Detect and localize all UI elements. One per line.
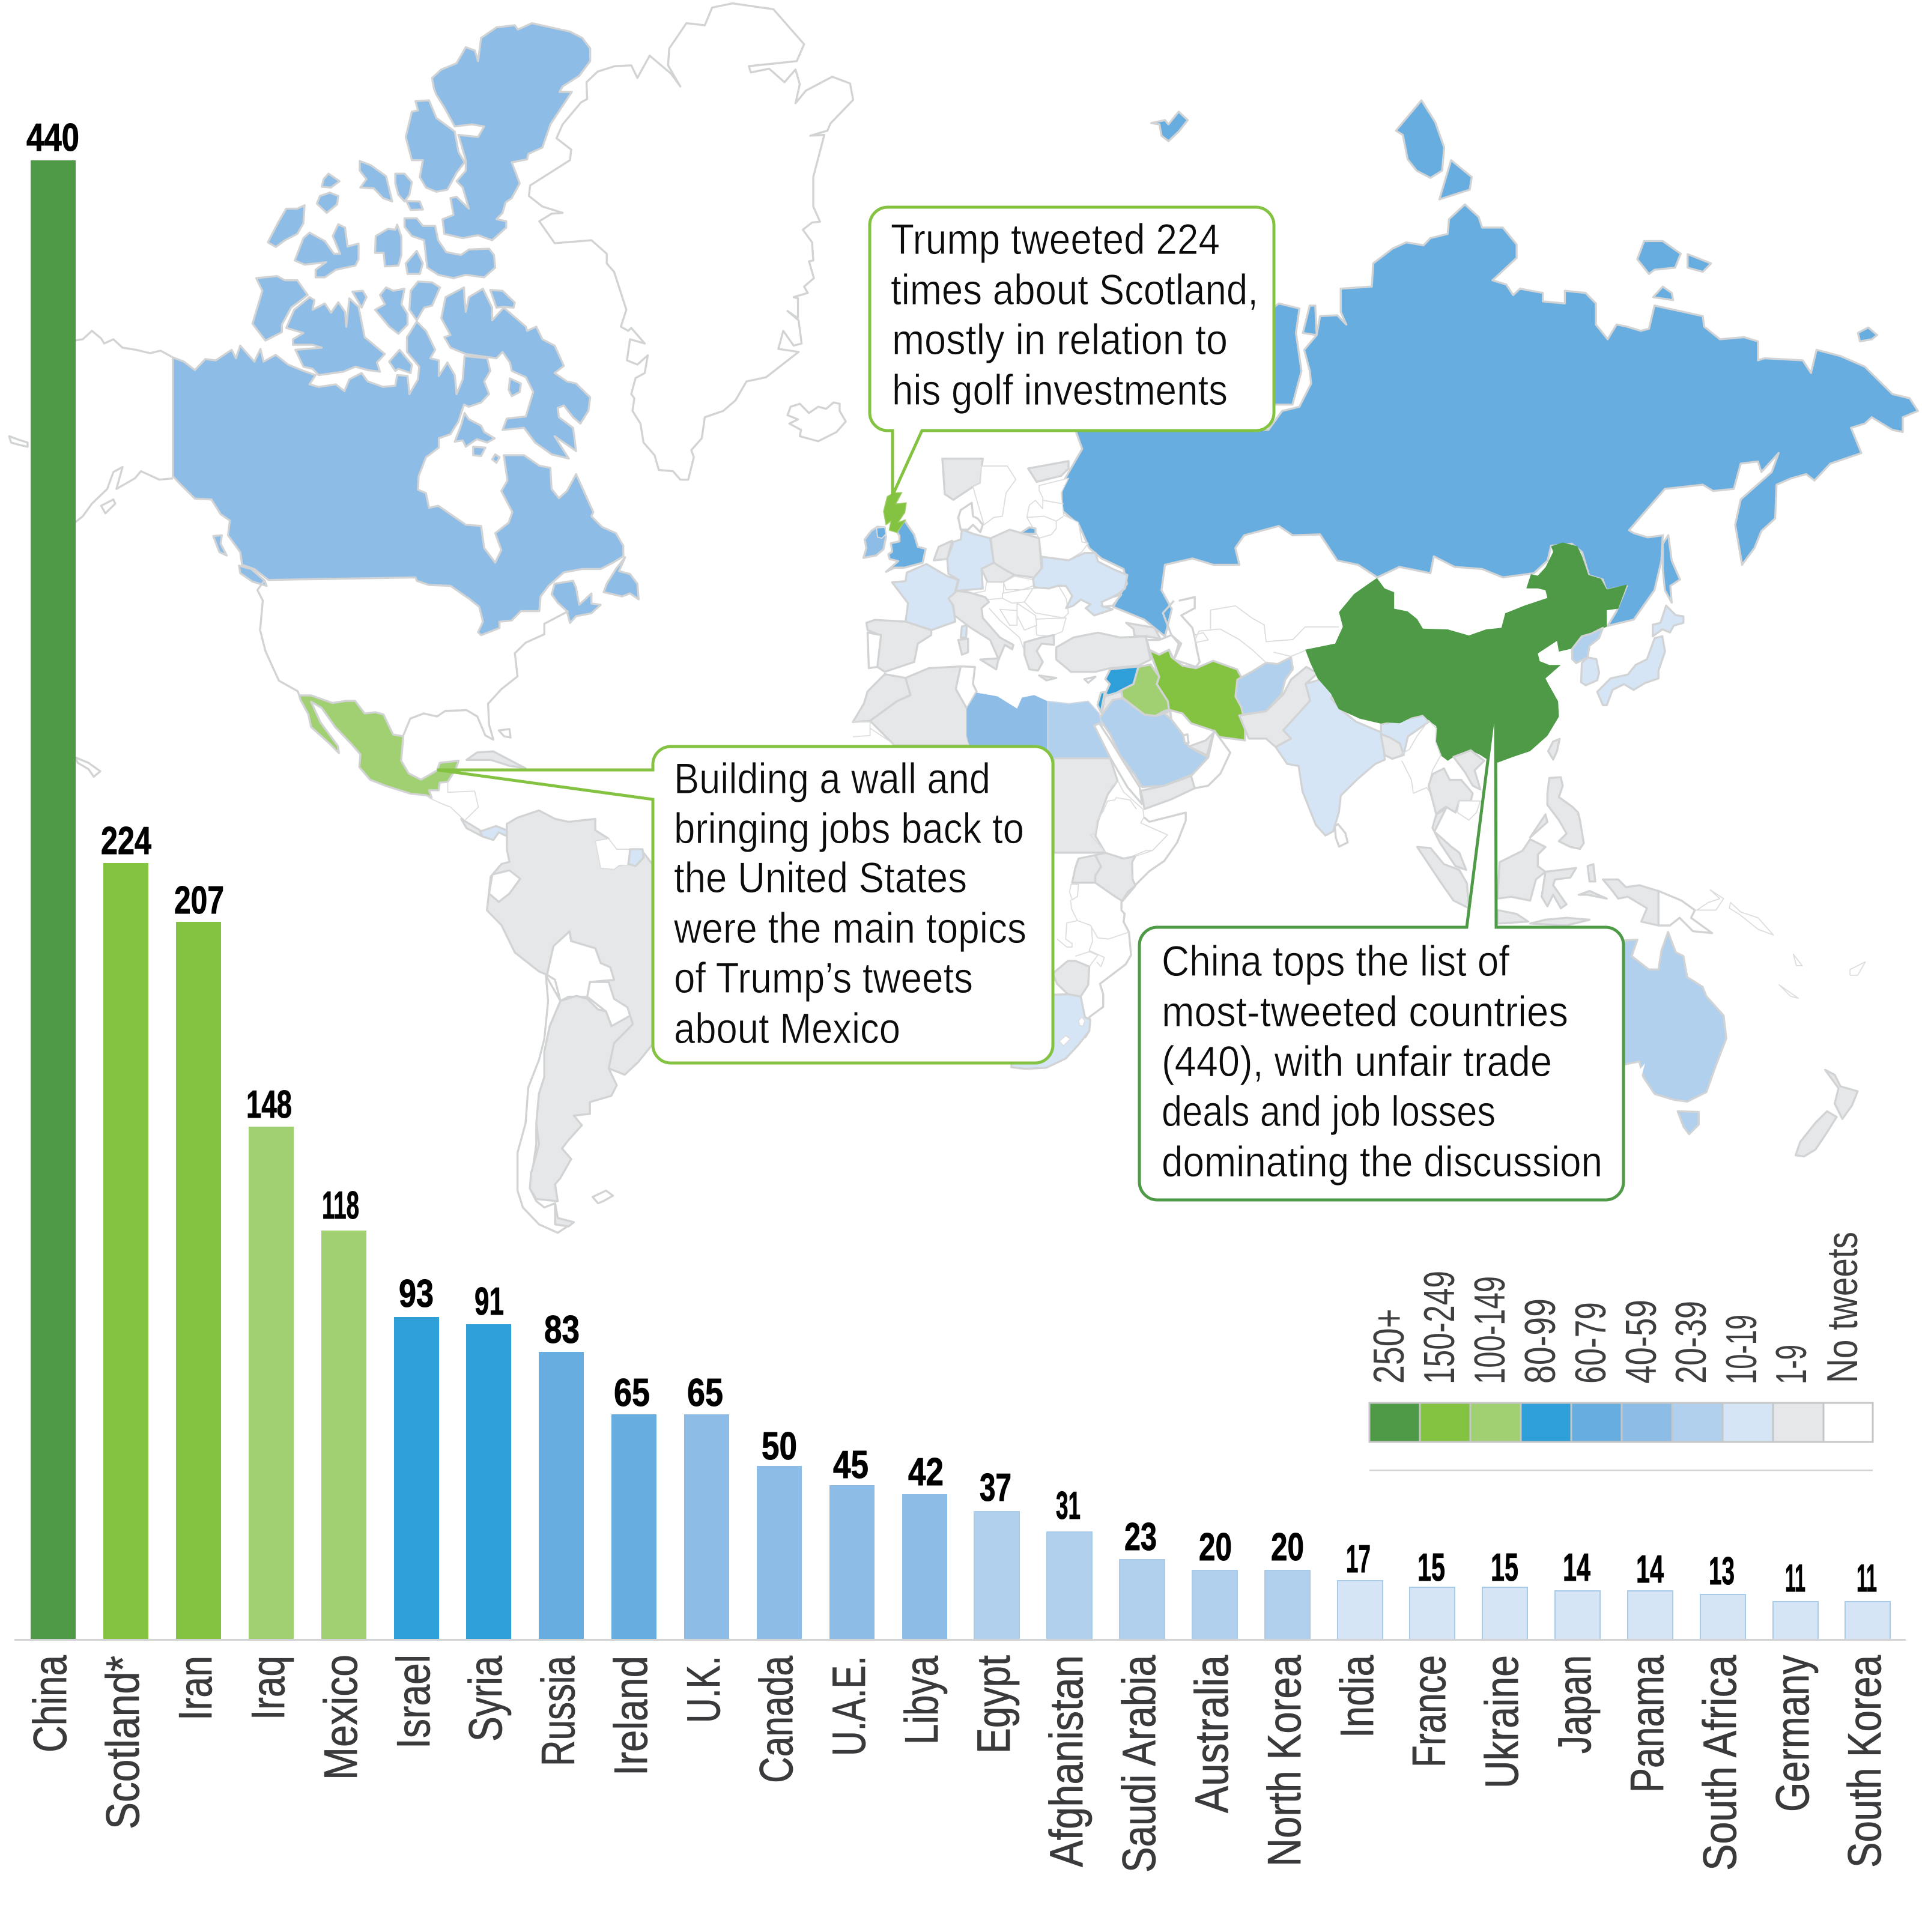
Thailand	[1429, 768, 1473, 814]
Sardinia	[958, 639, 968, 655]
Zambia and Malawi	[1057, 921, 1078, 947]
legend labels: 20-39	[1667, 1301, 1715, 1384]
Wrangel Island	[1858, 327, 1877, 341]
Baffin Island	[441, 288, 590, 459]
value labels	[26, 115, 1877, 1600]
value labels: 65	[687, 1370, 723, 1414]
Central Asia borders	[1195, 629, 1266, 663]
Myanmar outline	[1400, 721, 1441, 816]
Palawan	[1530, 814, 1547, 837]
Qatar	[1183, 734, 1189, 743]
Ellesmere Island	[432, 23, 590, 240]
New Caledonia	[1779, 985, 1798, 998]
Panama	[480, 826, 509, 840]
value labels: 17	[1346, 1537, 1371, 1581]
Iceland	[787, 402, 846, 441]
Kuwait	[1163, 711, 1171, 719]
callout: Scotland: mostly in relation to	[892, 316, 1228, 364]
Tunisia	[956, 667, 977, 709]
USA east coast	[403, 611, 568, 740]
Ecuador	[489, 870, 520, 902]
Georgia and Azerbaijan	[1147, 635, 1179, 659]
Sri Lanka	[1335, 824, 1348, 847]
callout: Mexico	[437, 746, 1053, 1063]
Ukraine	[1033, 553, 1127, 616]
Tasmania	[1678, 1111, 1699, 1134]
Lithuania border	[1039, 521, 1056, 538]
Bosnia	[1000, 610, 1017, 625]
country labels: South Korea	[1838, 1655, 1891, 1868]
country labels: Canada	[750, 1656, 802, 1783]
Moluccas	[1587, 864, 1595, 882]
Kaliningrad	[1020, 527, 1035, 534]
Honshu	[1597, 636, 1665, 705]
North Caucasus coast	[1126, 623, 1160, 639]
East Asia and Oceania	[1305, 542, 1866, 1157]
Philippines	[1547, 777, 1584, 849]
value labels: 23	[1124, 1515, 1157, 1558]
Severnaya Zemlya south	[1439, 160, 1472, 199]
Taiwan	[1548, 739, 1560, 760]
callout: China: (440), with unfair trade	[1162, 1038, 1552, 1086]
country labels: Japan	[1548, 1655, 1601, 1754]
China	[1305, 542, 1627, 763]
legend labels: 80-99	[1517, 1298, 1565, 1384]
Norway	[942, 459, 983, 500]
Solomon Islands	[1729, 903, 1774, 935]
Italy	[948, 591, 1013, 659]
Tierra del Fuego	[555, 1204, 574, 1226]
value labels: 42	[908, 1450, 944, 1494]
Seram	[1579, 891, 1607, 898]
callout: Scotland: Trump tweeted 224	[891, 216, 1220, 264]
country labels: Afghanistan	[1040, 1655, 1093, 1867]
value labels: 15	[1417, 1545, 1445, 1589]
Newfoundland	[604, 557, 638, 599]
Argentina	[530, 996, 633, 1201]
Severnaya Zemlya	[1396, 100, 1444, 178]
UAE	[1189, 733, 1213, 755]
callout: China: dominating the discussion	[1162, 1139, 1602, 1186]
French Guiana	[628, 849, 643, 866]
Falkland Islands	[593, 1191, 613, 1204]
country labels: Australia	[1185, 1655, 1238, 1813]
Tajik border	[1274, 650, 1306, 656]
Greenland	[529, 4, 853, 480]
Benelux	[934, 541, 952, 560]
Hokkaido	[1653, 605, 1684, 636]
Uzbek border	[1210, 606, 1339, 641]
Belarus north border	[1027, 516, 1064, 521]
Central America outline	[429, 798, 509, 839]
Saudi Arabia	[1099, 698, 1208, 787]
Caspian Sea outline	[1163, 597, 1199, 667]
value labels: 148	[246, 1082, 292, 1126]
New Britain	[1697, 890, 1724, 910]
legend	[1365, 1232, 1873, 1471]
Crete	[1039, 676, 1056, 680]
Portugal	[867, 632, 881, 668]
North America north: Canada, Greenland, Iceland, Alaska	[9, 4, 853, 635]
callout: Mexico: about Mexico	[674, 1005, 900, 1053]
Malawi	[1090, 927, 1105, 966]
Afghanistan	[1235, 657, 1293, 715]
Germany	[947, 530, 994, 591]
Spencer Gulf	[1634, 1064, 1645, 1077]
Cuba	[467, 751, 526, 768]
Egypt	[1047, 701, 1110, 759]
East Africa	[1011, 781, 1348, 1069]
England and Wales	[886, 520, 926, 572]
Indonesian New Guinea	[1603, 879, 1658, 925]
Sulawesi	[1542, 868, 1576, 908]
Corsica	[961, 625, 967, 638]
callout: Scotland	[870, 207, 1274, 495]
country labels: Libya	[895, 1656, 948, 1745]
legend labels	[1365, 1232, 1867, 1384]
Bolivia	[547, 931, 614, 1001]
Ireland	[864, 527, 886, 558]
Alaska outline	[74, 331, 173, 357]
country labels: Mexico	[314, 1655, 367, 1780]
value labels: 31	[1056, 1483, 1081, 1527]
Papua New Guinea	[1658, 891, 1712, 933]
country labels: France	[1402, 1655, 1455, 1767]
value labels: 14	[1636, 1547, 1664, 1591]
Rwanda and lakes	[1070, 884, 1079, 900]
South Korea	[1581, 658, 1599, 685]
Denmark	[958, 503, 983, 532]
bar chart: 11	[1857, 1556, 1877, 1600]
Somalia outline	[1135, 813, 1186, 885]
Sweden	[973, 466, 1016, 525]
Baltics and Belarus	[1027, 478, 1088, 560]
country labels: Iran	[169, 1656, 222, 1721]
Southampton Island	[455, 413, 494, 447]
Aral Sea outline	[1195, 632, 1208, 643]
Oman	[1191, 731, 1230, 788]
Spain	[866, 620, 932, 672]
West Sahara lines	[853, 722, 870, 737]
country labels: Ireland	[604, 1656, 657, 1776]
value labels: 207	[174, 878, 224, 922]
Middle East and South Asia	[1195, 606, 1429, 835]
Lesser Sunda islands	[1530, 918, 1589, 925]
legend labels: 1-9	[1768, 1345, 1816, 1384]
Somalia border	[1135, 835, 1168, 856]
Iraq	[1121, 664, 1169, 716]
value labels: 20	[1199, 1525, 1232, 1569]
country labels: Egypt	[967, 1655, 1020, 1754]
Algeria	[870, 667, 969, 745]
callout: Mexico: Building a wall and	[674, 756, 990, 803]
country labels: China	[23, 1655, 76, 1752]
value labels: 93	[399, 1271, 434, 1315]
callout: China: deals and job losses	[1162, 1088, 1496, 1136]
Sumatra	[1417, 847, 1469, 908]
Greece	[1025, 635, 1054, 671]
value labels: 45	[833, 1443, 869, 1486]
Malaysia	[1432, 808, 1466, 870]
country labels: Scotland*	[96, 1656, 149, 1829]
country labels: Ukraine	[1475, 1655, 1528, 1788]
Sakhalin	[1663, 535, 1680, 603]
Czechia	[981, 563, 1014, 583]
country labels: Syria	[459, 1656, 512, 1742]
Cyprus	[1085, 677, 1096, 683]
Red Sea gap	[1094, 723, 1142, 804]
Aleutian island	[9, 436, 28, 447]
Israel	[1097, 692, 1105, 712]
value labels: 118	[322, 1183, 359, 1227]
Sudan	[1054, 759, 1118, 853]
Central America north	[448, 782, 478, 820]
India	[1276, 677, 1429, 835]
Sicily	[980, 658, 999, 670]
Russia and Arctic Asia	[1061, 100, 1918, 637]
callout: Mexico: were the main topics	[673, 905, 1026, 952]
Vietnam and Laos	[1454, 751, 1484, 790]
country labels	[23, 1655, 1891, 1873]
Turkey	[1056, 632, 1151, 672]
legend labels: No tweets	[1819, 1232, 1867, 1383]
Guyana and Suriname	[595, 839, 630, 870]
Scotland	[884, 492, 906, 533]
Costa Rica	[461, 819, 483, 837]
callout: Mexico: of Trump’s tweets	[674, 955, 973, 1002]
country labels: U.A.E.	[822, 1656, 875, 1756]
Iran	[1150, 650, 1245, 740]
Finland	[1028, 461, 1069, 482]
Europe, North Africa and Near East	[853, 459, 1245, 853]
South America grey	[487, 810, 657, 1075]
Bangladesh	[1381, 734, 1404, 759]
callout: Scotland: times about Scotland,	[891, 267, 1258, 314]
legend labels: 60-79	[1567, 1302, 1615, 1384]
USA west coast	[258, 581, 299, 695]
Florida keys	[499, 729, 511, 737]
Kenya	[1096, 853, 1135, 901]
Northern Ireland	[877, 527, 886, 538]
legend swatches	[1369, 1403, 1873, 1442]
value labels: 14	[1563, 1545, 1590, 1589]
value labels: 11	[1785, 1556, 1805, 1600]
value labels: 91	[474, 1279, 504, 1323]
Maritimes	[551, 581, 601, 623]
Pakistan	[1239, 667, 1318, 747]
value labels: 83	[544, 1307, 580, 1351]
Lesotho	[1060, 1035, 1070, 1046]
Lyakhovsky Islands	[1653, 286, 1673, 300]
legend labels: 150-249	[1416, 1271, 1464, 1384]
value labels: 65	[614, 1370, 650, 1414]
Franz Josef Land	[1151, 112, 1187, 141]
Bulgaria	[1035, 618, 1066, 636]
Vaygach sliver	[1303, 306, 1317, 335]
callout: Scotland: his golf investments	[892, 367, 1228, 414]
France	[892, 564, 958, 630]
New Siberian Islands	[1637, 241, 1681, 274]
New Siberian east	[1688, 254, 1711, 272]
New Zealand north	[1825, 1070, 1858, 1119]
value labels: 13	[1709, 1549, 1735, 1593]
country labels: Panama	[1620, 1655, 1673, 1793]
Crimea	[1102, 595, 1121, 607]
Baltic borders	[1043, 500, 1064, 504]
country labels: Israel	[387, 1655, 440, 1749]
Mexico	[299, 695, 458, 798]
Austria	[967, 583, 1004, 599]
Novaya Zemlya	[1269, 303, 1302, 405]
Kodiak	[101, 500, 115, 513]
Yemen	[1141, 776, 1195, 809]
Zimbabwe	[1053, 961, 1090, 996]
Australia	[1620, 932, 1726, 1101]
South Africa	[1011, 994, 1090, 1069]
value labels: 15	[1491, 1545, 1518, 1589]
country labels: Germany	[1766, 1655, 1819, 1812]
Americas south: USA, Mexico, South America	[75, 581, 657, 1233]
Poland	[990, 530, 1041, 578]
bars	[31, 160, 1890, 1640]
callout: China	[1139, 700, 1623, 1200]
East African coast	[1085, 886, 1135, 1038]
Mali border	[870, 728, 896, 745]
country labels: Saudi Arabia	[1112, 1655, 1165, 1873]
Canada mainland	[173, 321, 623, 635]
country labels: India	[1330, 1655, 1383, 1738]
Java	[1497, 910, 1528, 924]
Fiji	[1850, 962, 1866, 975]
value labels: 440	[26, 115, 79, 159]
Borneo	[1497, 839, 1545, 901]
callout: Mexico: the United States	[674, 855, 967, 902]
legend labels: 10-19	[1718, 1315, 1766, 1384]
legend labels: 40-59	[1617, 1300, 1666, 1384]
callout: China: China tops the list of	[1162, 938, 1509, 986]
Ethiopia and Eritrea outline	[1090, 781, 1168, 859]
Balkans	[1017, 603, 1037, 630]
Syria	[1105, 667, 1138, 696]
country labels: South Africa	[1693, 1655, 1746, 1871]
legend labels: 250+	[1365, 1309, 1413, 1384]
Alaska south coast	[74, 467, 173, 522]
Vanuatu	[1793, 954, 1802, 966]
callout: China: most-tweeted countries	[1162, 989, 1568, 1036]
Romania	[1025, 586, 1069, 618]
Libya	[967, 692, 1047, 763]
Tanzania border	[1070, 900, 1129, 939]
legend labels: 100-149	[1466, 1276, 1514, 1384]
Cambodia	[1457, 801, 1481, 820]
country labels: Iraq	[241, 1656, 294, 1720]
value labels: 37	[980, 1465, 1011, 1509]
Chile	[518, 976, 574, 1233]
North Korea	[1572, 628, 1603, 663]
country labels: U.K.	[677, 1656, 730, 1723]
country labels: Russia	[532, 1656, 584, 1766]
Adriatic coast	[989, 608, 1025, 651]
Hawaii	[75, 757, 100, 777]
New Zealand south	[1796, 1111, 1837, 1157]
country labels: North Korea	[1258, 1655, 1311, 1867]
value labels: 20	[1271, 1525, 1304, 1569]
Paraguay	[587, 982, 630, 1026]
value labels: 50	[762, 1424, 797, 1468]
Uganda	[1072, 855, 1101, 883]
Arctic islands	[213, 100, 521, 586]
Morocco	[853, 674, 911, 722]
world map	[9, 4, 1918, 1233]
Jordan	[1102, 691, 1123, 715]
callout: Mexico: bringing jobs back to	[674, 805, 1024, 853]
Swaziland	[1079, 1017, 1085, 1026]
Russia mainland	[1061, 204, 1918, 637]
Slovakia	[1004, 577, 1034, 590]
Mozambique border	[1075, 952, 1098, 966]
Hungary	[1002, 589, 1033, 603]
value labels: 224	[101, 819, 151, 862]
